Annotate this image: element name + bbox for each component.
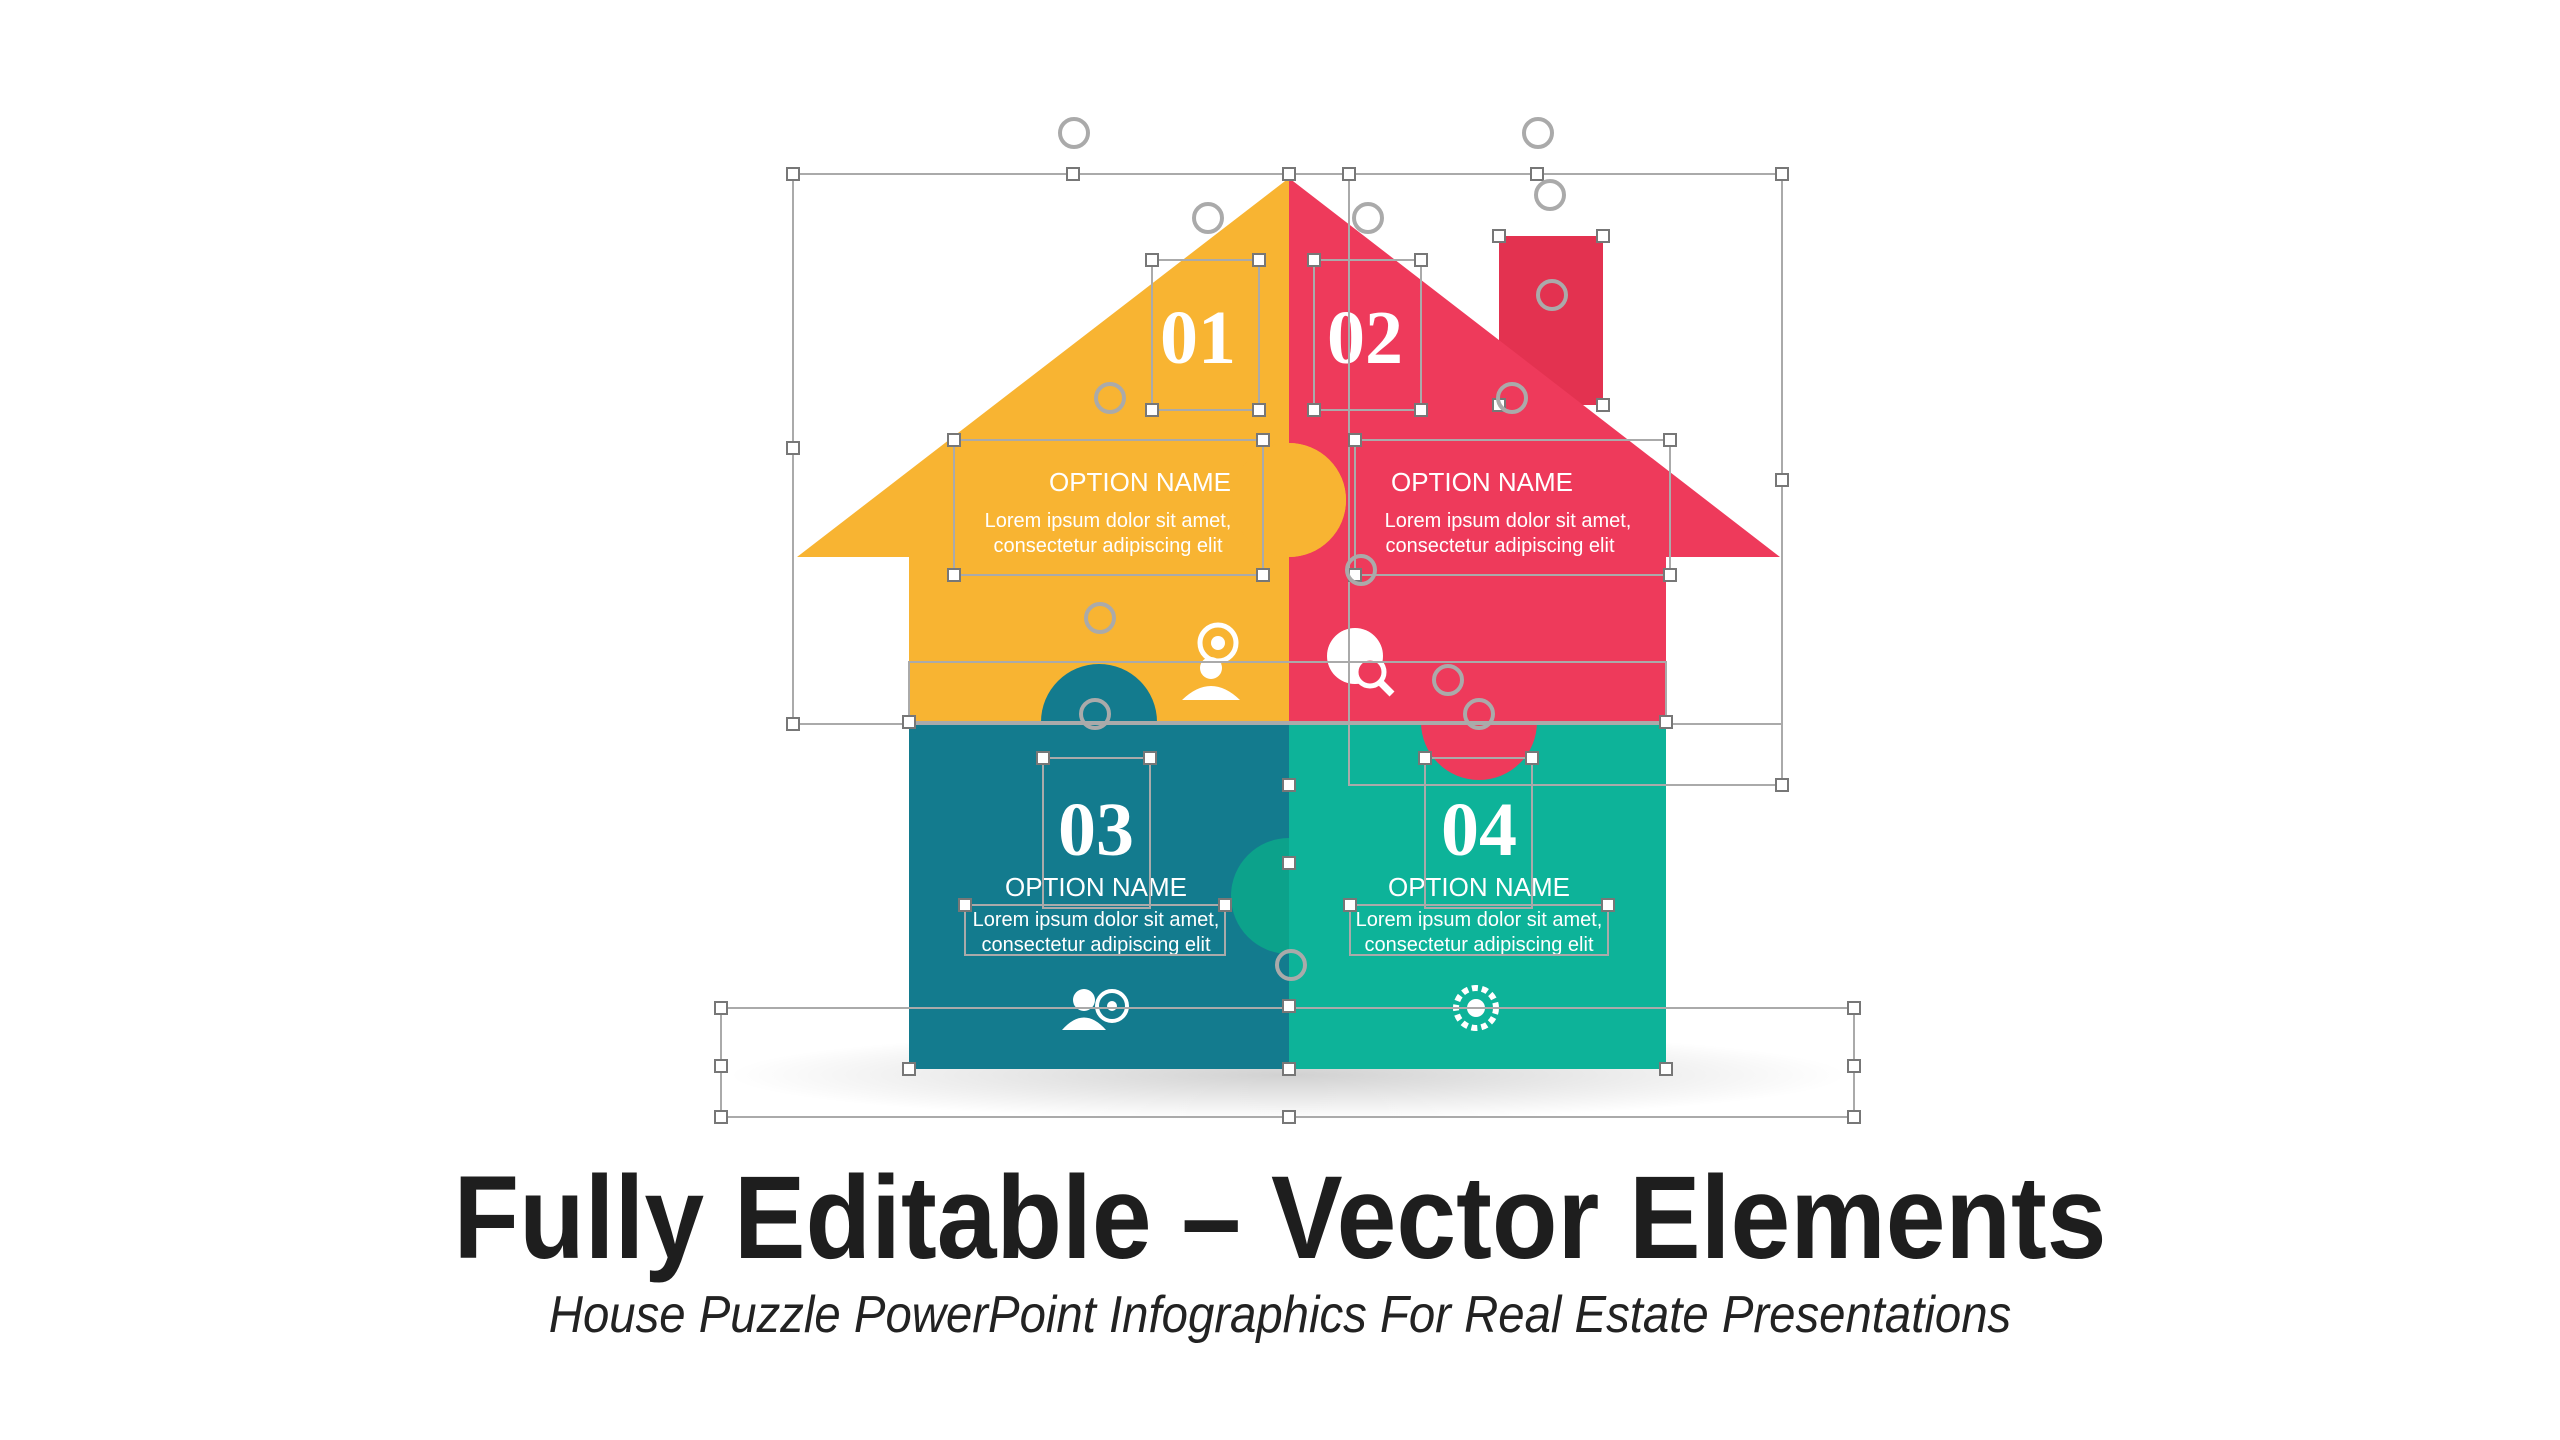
text block 01 <box>985 467 1231 557</box>
selection handles <box>715 168 1860 1123</box>
piece 03 teal <box>909 664 1289 1069</box>
text block 03 <box>973 872 1219 956</box>
text block 02: OPTION NAME <box>1391 467 1573 497</box>
icon: person target 2 <box>1062 989 1127 1030</box>
icon: globe search <box>1327 628 1392 694</box>
piece 02 red <box>1232 178 1780 722</box>
number 04: 04 <box>1441 788 1517 872</box>
text block 03: Lorem ipsum dolor sit amet, <box>973 909 1219 931</box>
text block 04 <box>1356 872 1602 956</box>
number 01: 01 <box>1160 296 1236 380</box>
title: Fully Editable – Vector Elements <box>453 1152 2107 1284</box>
shadow <box>728 1030 1848 1120</box>
text block 01: OPTION NAME <box>1049 467 1231 497</box>
piece 01 yellow <box>797 178 1346 722</box>
text block 01: Lorem ipsum dolor sit amet, <box>985 510 1231 532</box>
chimney <box>1499 236 1603 405</box>
text block 01: consectetur adipiscing elit <box>993 535 1223 557</box>
text block 02 <box>1385 467 1631 557</box>
text block 02: Lorem ipsum dolor sit amet, <box>1385 510 1631 532</box>
icon: gear badge <box>1456 988 1496 1028</box>
subtitle: House Puzzle PowerPoint Infographics For Real Estate Presentations <box>549 1286 2011 1344</box>
icon: person target <box>1182 625 1240 700</box>
number 03: 03 <box>1058 788 1134 872</box>
number 02: 02 <box>1327 296 1403 380</box>
rotation handles <box>1060 119 1566 979</box>
text block 02: consectetur adipiscing elit <box>1385 535 1615 557</box>
text block 03: consectetur adipiscing elit <box>981 934 1211 956</box>
text block 04: consectetur adipiscing elit <box>1364 934 1594 956</box>
text block 04: OPTION NAME <box>1388 872 1570 902</box>
text block 03: OPTION NAME <box>1005 872 1187 902</box>
selection boxes <box>721 174 1854 1117</box>
piece 04 green <box>1231 722 1666 1069</box>
text block 04: Lorem ipsum dolor sit amet, <box>1356 909 1602 931</box>
